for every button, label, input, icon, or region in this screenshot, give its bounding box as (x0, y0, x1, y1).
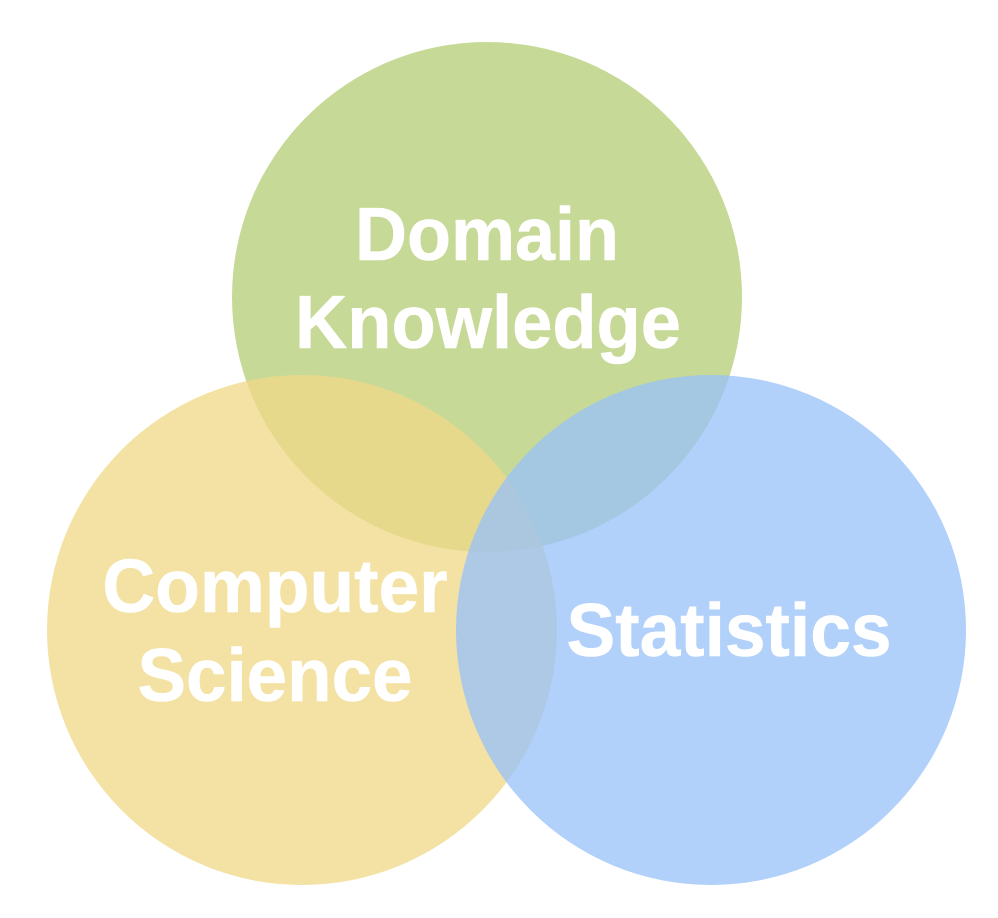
label: computer science: Computer (102, 544, 448, 628)
label: computer science: Science (138, 633, 412, 717)
label: domain knowledge: Domain (355, 192, 619, 276)
label: domain knowledge (295, 192, 681, 364)
label: computer science (102, 544, 448, 717)
circle: domain knowledge (232, 42, 742, 552)
circle: computer science (47, 375, 557, 885)
circle: statistics (456, 375, 966, 885)
label: statistics: Statistics (566, 588, 892, 672)
label: domain knowledge: Knowledge (295, 280, 681, 364)
